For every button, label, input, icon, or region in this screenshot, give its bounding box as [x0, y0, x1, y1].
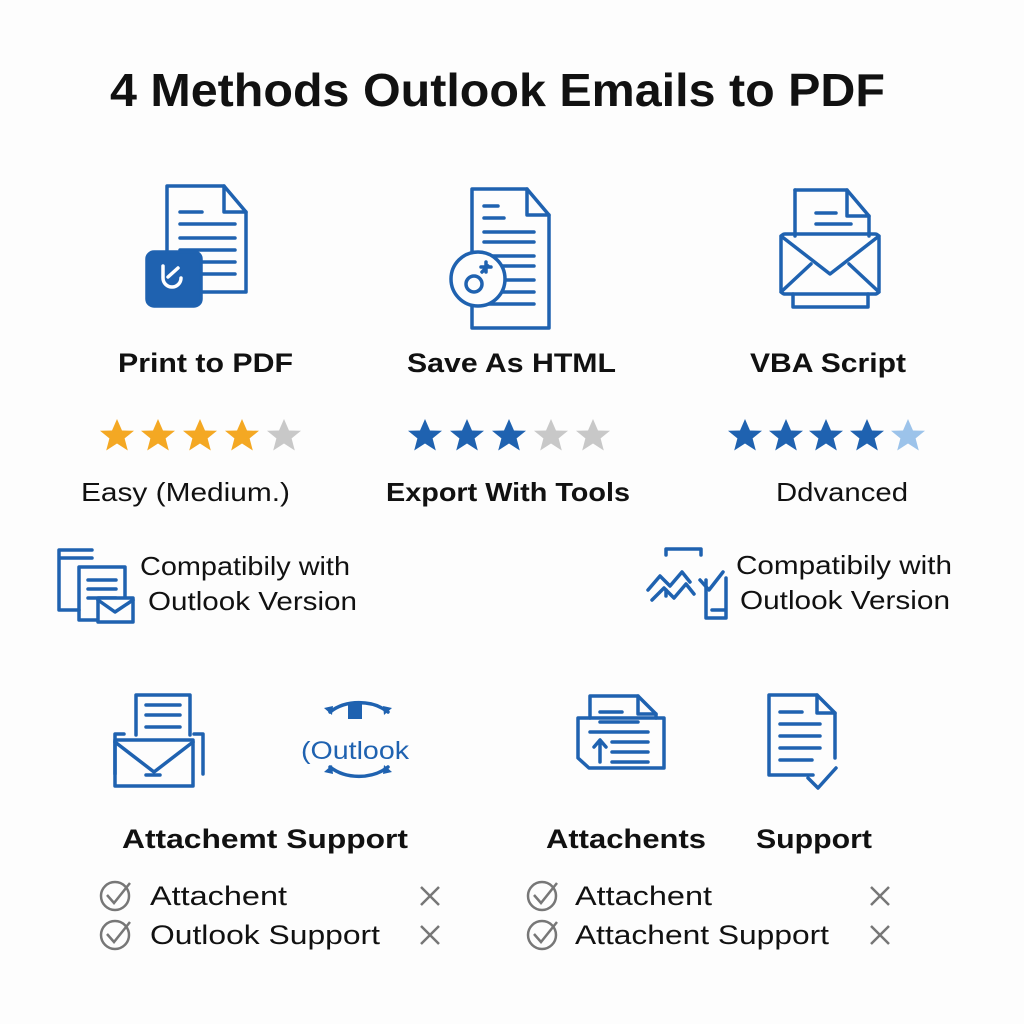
- stars: save as html: [408, 419, 610, 450]
- icon: compat right: [648, 549, 726, 618]
- checklist left: Outlook Support: [150, 920, 381, 950]
- heading: methods: Print to PDF: [118, 348, 293, 378]
- checklist right: Attachent: [575, 881, 713, 911]
- text: compat right: Outlook Version: [740, 585, 950, 615]
- checklist left: [101, 881, 439, 950]
- icon: save as html: [451, 189, 549, 328]
- stars: print to pdf: [100, 419, 301, 450]
- icon: support doc: [769, 695, 836, 788]
- bottom labels: Attachemt Support: [122, 824, 408, 854]
- text: compat left: Compatibily with: [140, 551, 350, 581]
- icon: compat left: [59, 550, 133, 622]
- text: compat left: Outlook Version: [148, 586, 357, 616]
- heading: methods: VBA Script: [750, 348, 906, 378]
- bottom labels: Support: [756, 824, 872, 854]
- icon: print to pdf: [147, 186, 246, 306]
- checklist right: Attachent Support: [575, 920, 830, 950]
- heading: methods: [118, 348, 906, 378]
- bottom labels: [122, 824, 872, 854]
- difficulty labels: [81, 477, 908, 507]
- stars: vba: [728, 419, 925, 450]
- checklist right: [528, 881, 889, 950]
- icon: attachment: [115, 695, 203, 786]
- bottom labels: Attachents: [546, 824, 706, 854]
- text: compat right: [736, 550, 952, 615]
- icon: attachents: [578, 696, 664, 768]
- icon: outlook sync: [301, 703, 410, 776]
- text: compat left: [140, 551, 357, 616]
- difficulty labels: Export With Tools: [386, 477, 630, 507]
- checklist left: Attachent: [150, 881, 288, 911]
- icon: vba script: [781, 190, 879, 307]
- heading: methods: Save As HTML: [407, 348, 616, 378]
- title: 4 Methods Outlook Emails to PDF: [110, 64, 885, 116]
- icon: outlook sync: (Outlook: [301, 737, 410, 765]
- difficulty labels: Easy (Medium.): [81, 477, 290, 507]
- difficulty labels: Ddvanced: [776, 477, 908, 507]
- text: compat right: Compatibily with: [736, 550, 952, 580]
